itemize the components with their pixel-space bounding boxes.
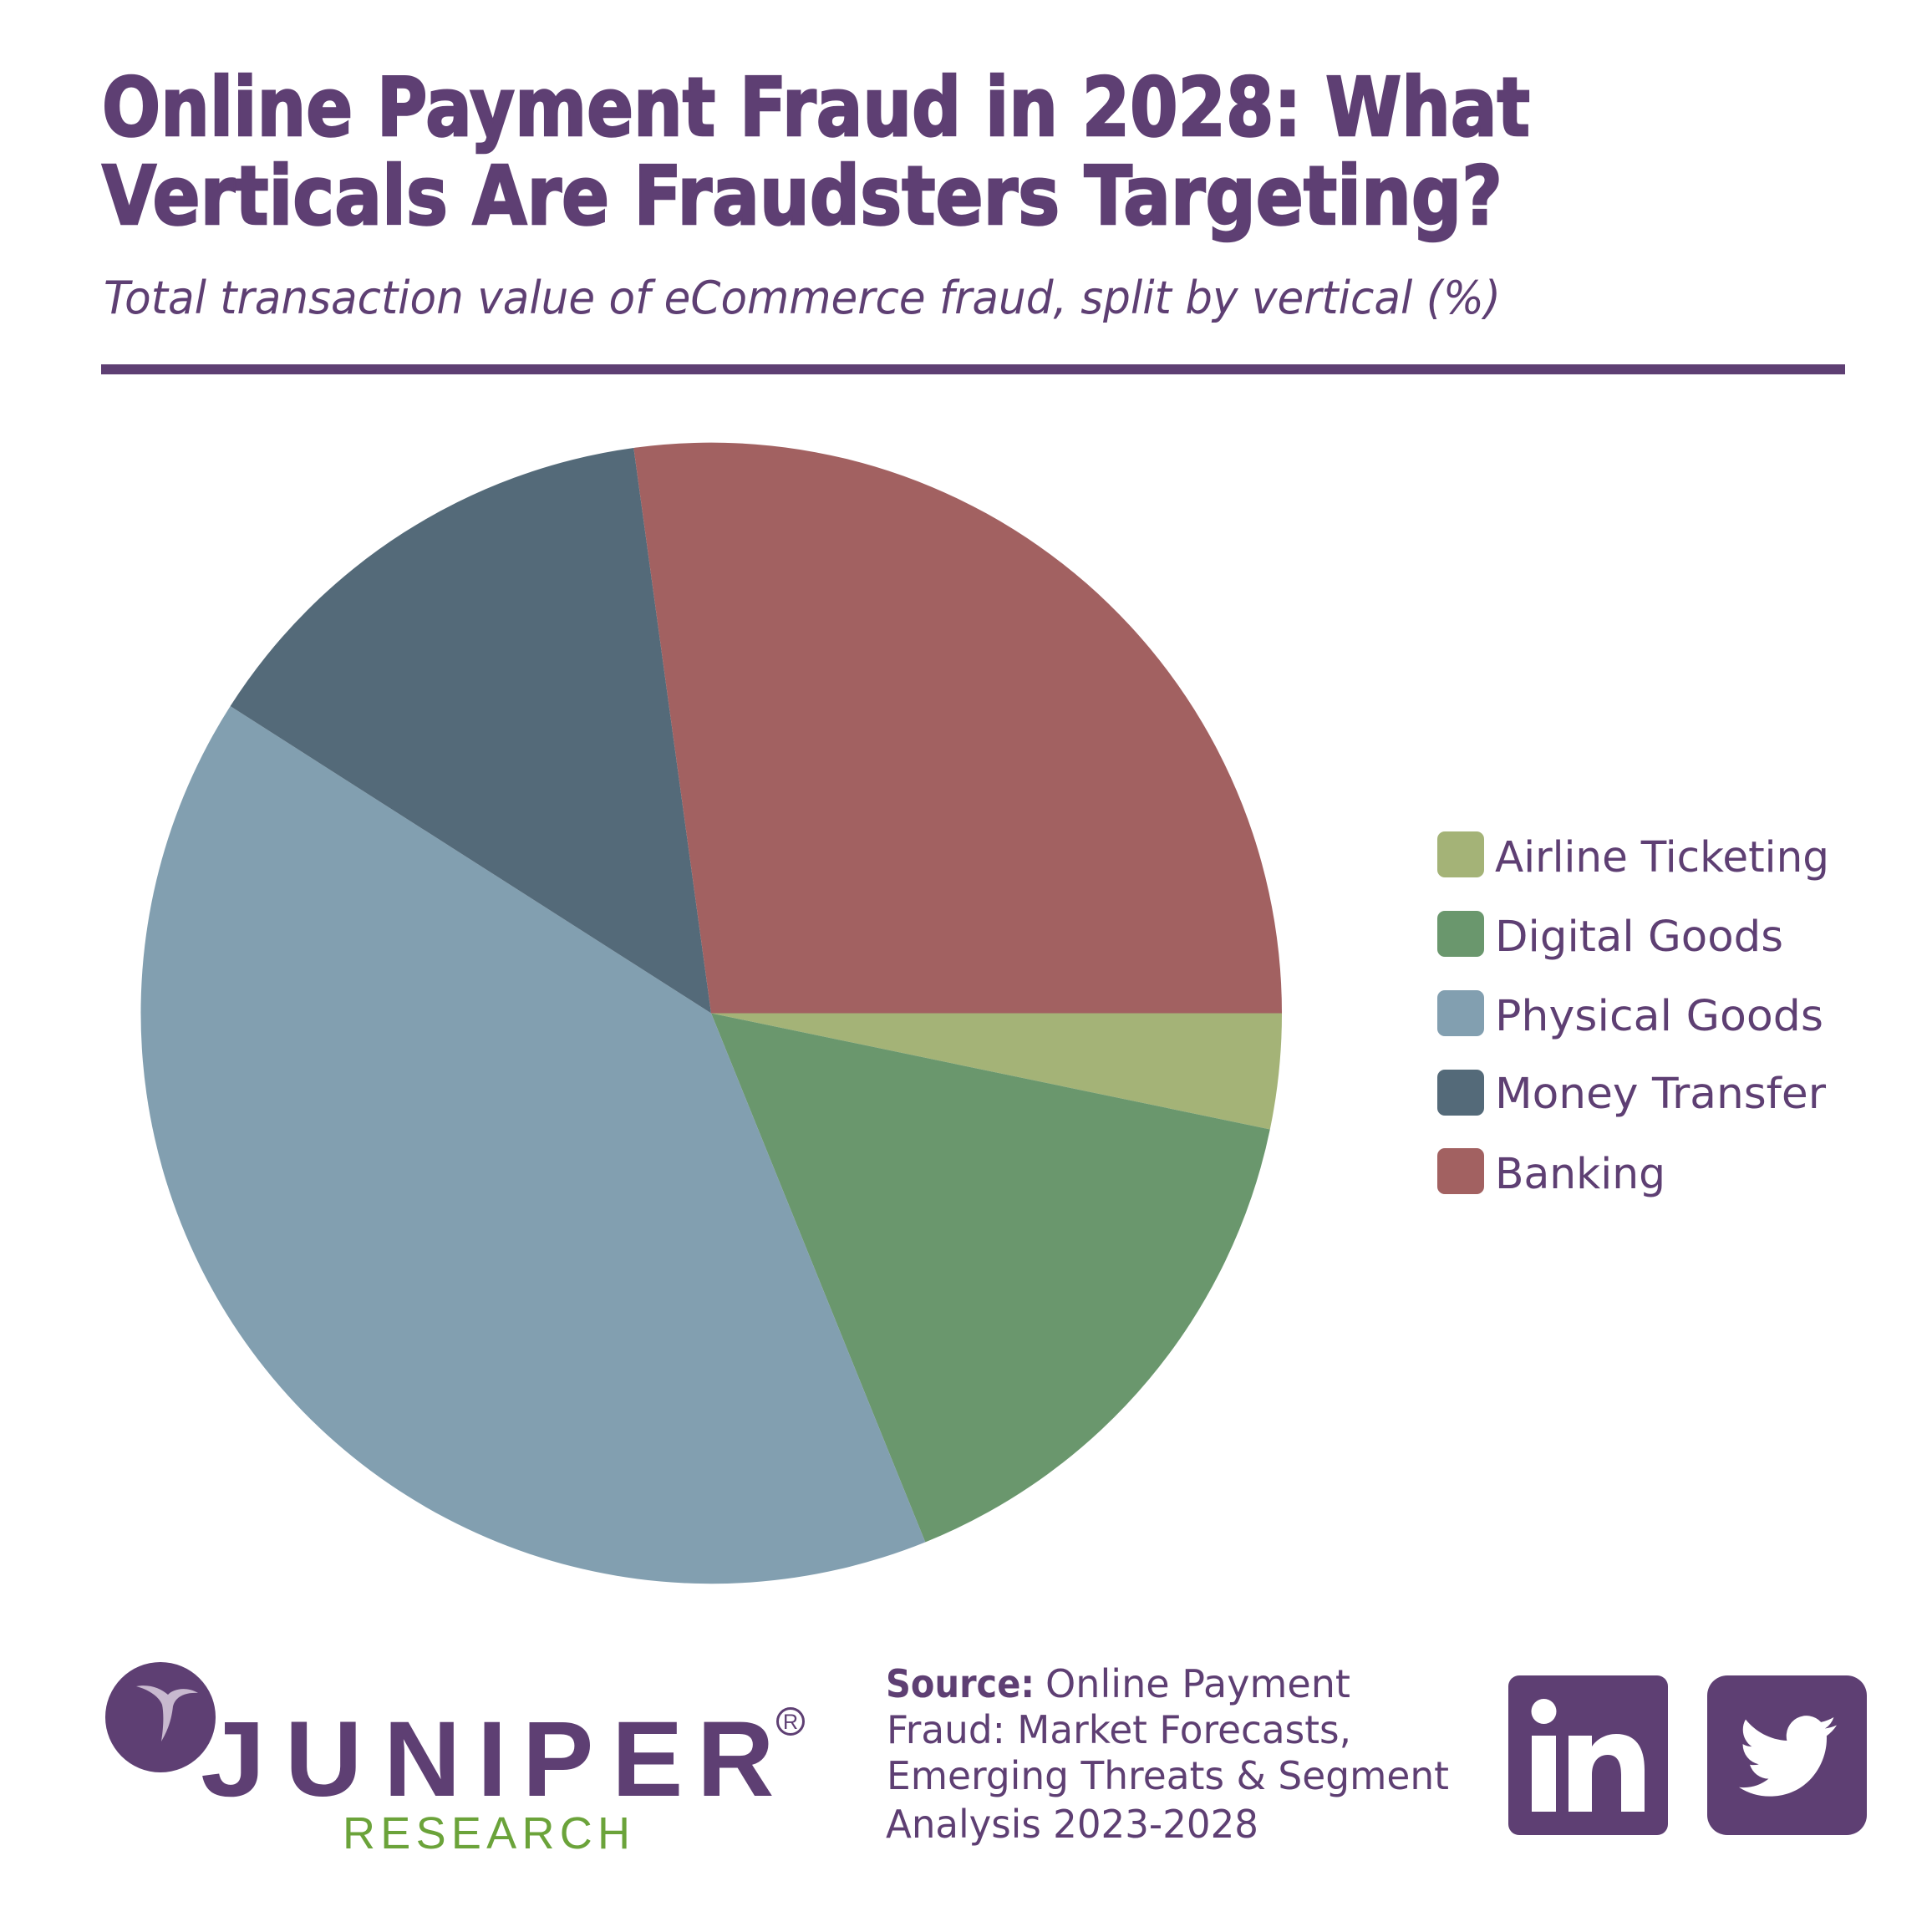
legend item: Banking: Banking [1495, 1150, 1665, 1199]
slice: Physical Goods [140, 706, 925, 1584]
title: Verticals Are Fraudsters Targeting? [102, 149, 1502, 243]
logo: Juniper Research [105, 1662, 804, 1858]
wordmark: J [201, 1700, 266, 1819]
legend item: Money Transfer: Money Transfer [1495, 1070, 1826, 1119]
tagline: RESEARCH [343, 1808, 630, 1858]
legend item: Airline Ticketing: Airline Ticketing [1495, 833, 1829, 882]
icon: Twitter [1707, 1675, 1867, 1835]
slice: Airline Ticketing [711, 1013, 1282, 1130]
title: Online Payment Fraud in 2028: What [102, 60, 1530, 155]
source text [886, 1661, 1449, 1847]
source text: Fraud: Market Forecasts, [887, 1707, 1351, 1752]
slice: Banking [633, 443, 1282, 1013]
title [102, 60, 1530, 243]
legend item: Physical Goods: Physical Goods [1495, 992, 1823, 1041]
wordmark: UNIPER [285, 1700, 774, 1819]
source text: Online Payment [1045, 1661, 1350, 1706]
legend [1437, 831, 1829, 1199]
logo mark [105, 1662, 216, 1772]
pie chart [140, 443, 1282, 1584]
icon: LinkedIn [1508, 1675, 1668, 1835]
source text: Analysis 2023-2028 [886, 1802, 1258, 1847]
source text: Emerging Threats & Segment [887, 1753, 1449, 1798]
legend item: Digital Goods: Digital Goods [1495, 913, 1783, 962]
slice: Digital Goods [711, 1013, 1270, 1543]
subtitle: Total transaction value of eCommerce fraud, split by vertical (%) [104, 272, 1501, 324]
slice: Money Transfer [231, 448, 711, 1013]
registered mark: R [783, 1711, 798, 1734]
registered mark [777, 1708, 804, 1735]
source text: Source: [886, 1661, 1035, 1706]
